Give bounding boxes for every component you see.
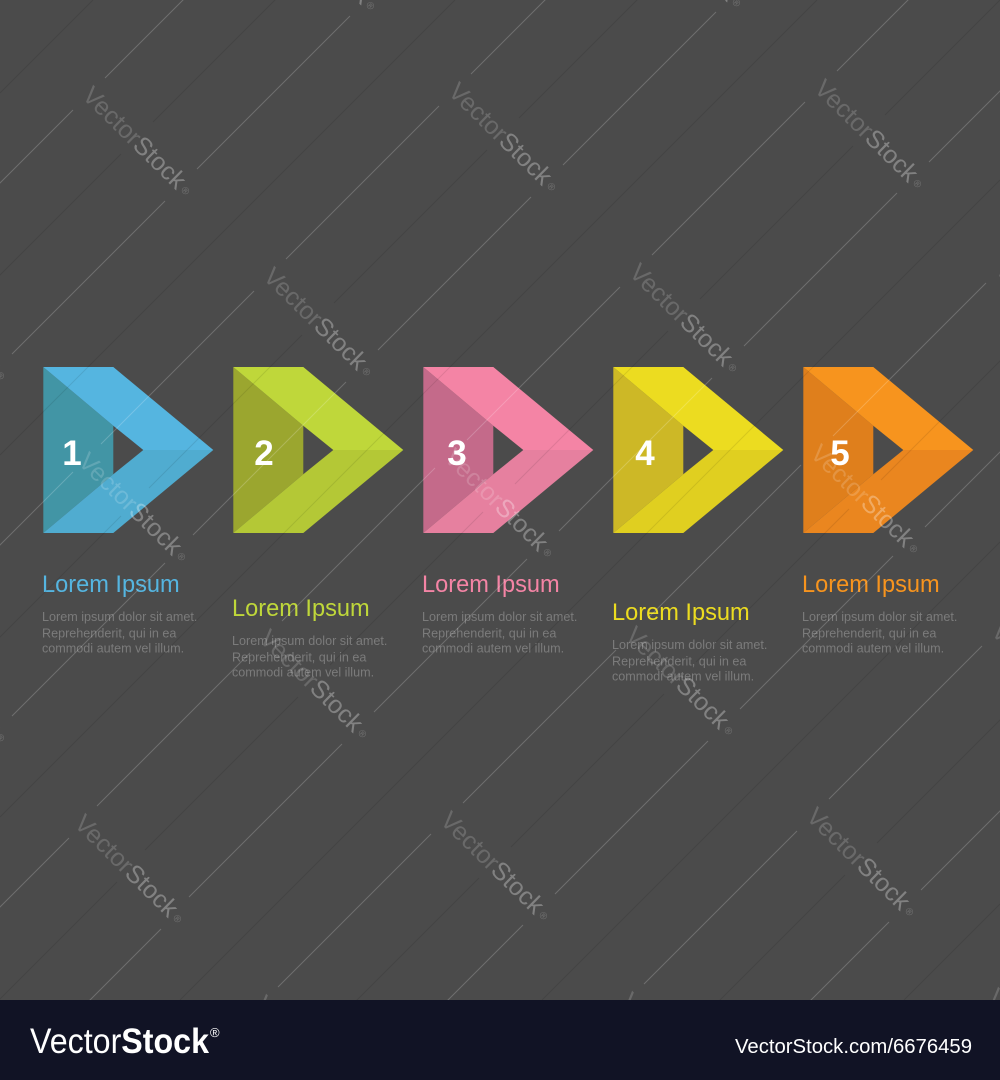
- step 4 text: Lorem Ipsum: [612, 600, 750, 626]
- watermark pattern: VectorStock: [805, 439, 920, 553]
- watermark pattern: ®: [178, 185, 192, 198]
- watermark pattern: V: [616, 987, 648, 1019]
- watermark pattern: VectorStock: [77, 81, 192, 195]
- step 1 text: Reprehenderit, qui in ea: [42, 626, 176, 640]
- arrow 1: blue: [43, 367, 213, 533]
- step 2 text: Reprehenderit, qui in ea: [232, 650, 366, 664]
- step 1 text: [42, 572, 197, 656]
- watermark pattern: VectorStock: [258, 262, 373, 376]
- step 5 text: Lorem Ipsum: [802, 572, 940, 598]
- watermark pattern: ®: [544, 181, 558, 194]
- watermark pattern: VectorStock: [254, 624, 369, 738]
- number 3: 3: [447, 434, 467, 473]
- watermark pattern: VectorStock: [443, 77, 558, 191]
- watermark pattern: ®: [174, 551, 188, 564]
- watermark pattern: VectorStock: [69, 809, 184, 923]
- number 4: 4: [635, 434, 655, 473]
- step 2 text: commodi autem vel illum.: [232, 666, 374, 680]
- watermark pattern: VectorStock: [801, 802, 916, 916]
- number 5: 5: [830, 434, 850, 473]
- step 3 text: Lorem ipsum dolor sit amet.: [422, 610, 577, 624]
- watermark pattern: ®: [359, 366, 373, 379]
- watermark pattern: ®: [906, 543, 920, 556]
- watermark pattern: VectorStock: [73, 447, 188, 561]
- footer bar: VectorStock: [30, 1022, 209, 1061]
- watermark pattern: ®: [902, 906, 916, 919]
- footer bar: [0, 1000, 1000, 1080]
- step 3 text: Reprehenderit, qui in ea: [422, 626, 556, 640]
- number 1: 1: [62, 434, 82, 473]
- step 4 text: commodi autem vel illum.: [612, 670, 754, 684]
- watermark pattern: ®: [540, 547, 554, 560]
- step 1 text: commodi autem vel illum.: [42, 642, 184, 656]
- watermark pattern: VectorStock: [624, 258, 739, 372]
- watermark pattern: VectorStock: [439, 443, 554, 557]
- number 2: 2: [254, 434, 274, 473]
- watermark pattern: ®: [363, 0, 377, 13]
- arrow 4: yellow: [613, 367, 783, 533]
- step 5 text: Lorem ipsum dolor sit amet.: [802, 610, 957, 624]
- step 3 text: [422, 572, 577, 656]
- watermark pattern: VectorStock: [809, 74, 924, 188]
- watermark pattern: V: [250, 990, 282, 1022]
- step 5 text: commodi autem vel illum.: [802, 642, 944, 656]
- step 5 text: [802, 572, 957, 656]
- watermark pattern: ®: [355, 728, 369, 741]
- watermark pattern: ®: [910, 178, 924, 191]
- step 3 text: Lorem Ipsum: [422, 572, 560, 598]
- arrow 3: pink: [423, 367, 593, 533]
- step 4 text: Reprehenderit, qui in ea: [612, 654, 746, 668]
- arrow 5: orange: [803, 367, 973, 533]
- step 4 text: Lorem ipsum dolor sit amet.: [612, 638, 767, 652]
- watermark pattern: VectorStock: [435, 806, 550, 920]
- step 4 text: [612, 600, 767, 684]
- step 2 text: Lorem ipsum dolor sit amet.: [232, 634, 387, 648]
- footer bar: ®: [210, 1025, 220, 1040]
- step 1 text: Lorem ipsum dolor sit amet.: [42, 610, 197, 624]
- watermark pattern: ®: [721, 725, 735, 738]
- arrow 2: green: [233, 367, 403, 533]
- watermark pattern: VectorStock: [620, 621, 735, 735]
- step 5 text: Reprehenderit, qui in ea: [802, 626, 936, 640]
- watermark pattern: ®: [170, 913, 184, 926]
- step 3 text: commodi autem vel illum.: [422, 642, 564, 656]
- step 2 text: Lorem Ipsum: [232, 596, 370, 622]
- watermark pattern: ®: [725, 362, 739, 375]
- footer bar: VectorStock.com/6676459: [735, 1036, 972, 1058]
- step 2 text: [232, 596, 387, 680]
- step 1 text: Lorem Ipsum: [42, 572, 180, 598]
- watermark pattern: ®: [536, 910, 550, 923]
